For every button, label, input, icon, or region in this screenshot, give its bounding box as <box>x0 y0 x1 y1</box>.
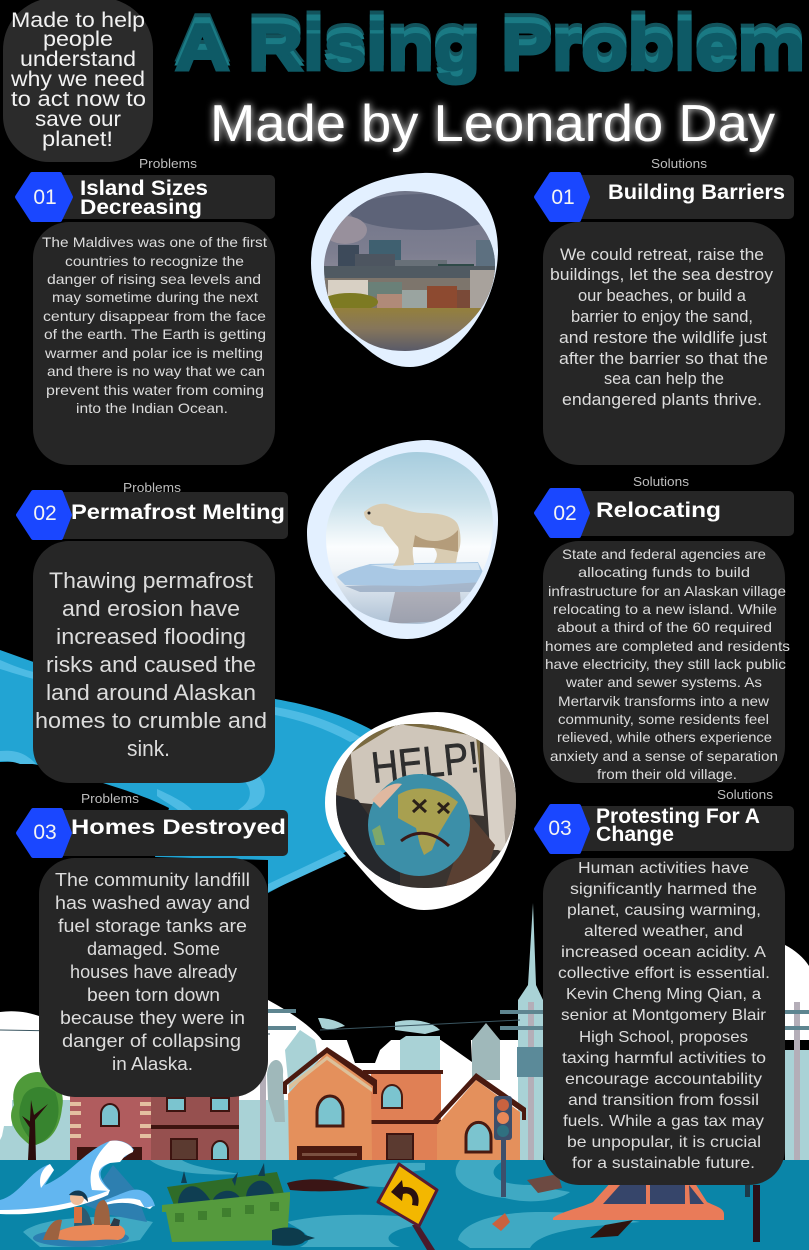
problem 1 text panel: danger of rising sea levels and <box>47 271 261 287</box>
problem 1 header: Decreasing <box>80 195 202 219</box>
solution 1 text panel: sea can help the <box>604 369 724 388</box>
solution 2 text panel: from their old village. <box>597 766 737 782</box>
subtitle: Made by Leonardo Day <box>210 95 775 153</box>
solution 2 text panel: allocating funds to build <box>578 564 750 580</box>
problem 1 text panel: century disappear from the face <box>43 308 266 324</box>
problem 3 text panel: houses have already <box>70 962 237 982</box>
solution 2 text panel: Mertarvik transforms into a new <box>558 693 770 709</box>
problem 3 text panel: because they were in <box>60 1008 245 1028</box>
intro note: save our <box>35 107 121 131</box>
solution 2 text panel: infrastructure for an Alaskan village <box>548 583 786 599</box>
solution 3 text panel: and transition from fossil <box>568 1092 759 1109</box>
solution 2 text panel: about a third of the 60 required <box>557 619 772 635</box>
person and dogs on raft <box>33 1191 129 1247</box>
solution 2 text panel: State and federal agencies are <box>562 546 766 562</box>
problem 2 text panel: increased flooding <box>56 624 246 649</box>
solution 3 text panel: altered weather, and <box>584 923 743 940</box>
problem 1 text panel: prevent this water from coming <box>46 382 264 398</box>
solution 3 text panel: increased ocean acidity. A <box>561 944 766 961</box>
solution 2 text panel: relocating to a new island. While <box>553 601 777 617</box>
solution 3 header: Change <box>596 822 674 846</box>
problem 3 header: 03 <box>33 821 57 844</box>
floating log <box>287 1179 370 1191</box>
solution 3 text panel: High School, proposes <box>579 1029 748 1046</box>
solution 3 header: 03 <box>548 817 572 840</box>
problem 1 text panel: The Maldives was one of the first <box>42 234 267 250</box>
problem 1 text panel: may sometime during the next <box>52 289 258 305</box>
problem 2 header <box>18 492 288 539</box>
solution 1 text panel: after the barrier so that the <box>559 349 768 368</box>
intro note: people <box>43 27 113 51</box>
photo: flooded city <box>311 173 500 367</box>
problem 3 header <box>18 810 288 856</box>
intro note <box>3 0 153 162</box>
problem 2 text panel: sink. <box>127 736 170 761</box>
solution 1 text panel: and restore the wildlife just <box>559 328 767 347</box>
problem 1 text panel: into the Indian Ocean. <box>76 400 228 416</box>
trash bag <box>272 1227 315 1246</box>
river background <box>0 650 372 893</box>
solution 3 text panel: fuels. While a gas tax may <box>563 1113 764 1130</box>
title: A Rising Problem <box>175 0 805 74</box>
solution 2 label: Solutions <box>633 474 690 489</box>
title: A Rising Problem <box>175 10 805 84</box>
solution 2 text panel: have electricity, they still lack public <box>545 656 786 672</box>
intro note: why we need <box>10 67 145 91</box>
problem 3 header: Homes Destroyed <box>71 815 286 839</box>
solution 2 text panel: anxiety and a sense of separation <box>550 748 778 764</box>
solution 3 text panel: be unpopular, it is crucial <box>567 1134 761 1151</box>
utility poles <box>0 1002 809 1160</box>
solution 3 label: Solutions <box>717 787 774 802</box>
problem 1 header: Island Sizes <box>80 176 208 200</box>
sinking car <box>553 1180 724 1220</box>
photo: polar bear on ice <box>307 440 500 639</box>
solution 1 text panel: We could retreat, raise the <box>560 245 764 264</box>
problem 1 text panel: warmer and polar ice is melting <box>44 345 263 361</box>
problem 2 text panel: homes to crumble and <box>35 708 267 733</box>
problem 1 label: Problems <box>139 156 198 171</box>
solution 3 header: Protesting For A <box>596 804 760 828</box>
solution 2 text panel: relieved, while others experience <box>557 729 772 745</box>
tree <box>11 1072 63 1160</box>
solution 2 header: 02 <box>553 502 577 525</box>
title: A Rising Problem <box>175 4 805 78</box>
problem 3 text panel: been torn down <box>87 985 220 1005</box>
solution 2 text panel: community, some residents feel <box>558 711 769 727</box>
problem 3 label: Problems <box>81 791 140 806</box>
problem 2 text panel: and erosion have <box>62 596 240 621</box>
solution 3 text panel: Kevin Cheng Ming Qian, a <box>566 986 761 1003</box>
solution 2 header <box>536 490 794 536</box>
orange houses <box>283 1047 526 1160</box>
solution 3 text panel: significantly harmed the <box>570 881 757 898</box>
flood water <box>0 1160 809 1250</box>
solution 1 text panel: endangered plants thrive. <box>562 390 762 409</box>
problem 3 text panel: The community landfill <box>55 870 250 890</box>
solution 2 text panel: water and sewer systems. As <box>565 674 762 690</box>
solution 2 header: Relocating <box>596 498 721 522</box>
problem 1 text panel: countries to recognize the <box>65 253 244 269</box>
problem 3 text panel <box>39 858 268 1097</box>
solution 3 text panel: collective effort is essential. <box>558 965 770 982</box>
solution 3 header <box>536 804 794 852</box>
solution 3 text panel: for a sustainable future. <box>572 1155 755 1172</box>
dumpster with bags <box>162 1163 290 1242</box>
problem 3 text panel: fuel storage tanks are <box>58 916 247 936</box>
solution 3 text panel: Human activities have <box>578 860 749 877</box>
problem 3 text panel: danger of collapsing <box>62 1031 241 1051</box>
solution 3 text panel: planet, causing warming, <box>567 902 761 919</box>
problem 2 label: Problems <box>123 480 182 495</box>
problem 1 text panel: of the earth. The Earth is getting <box>44 326 266 342</box>
problem 2 text panel: land around Alaskan <box>46 680 256 705</box>
problem 2 text panel: risks and caused the <box>46 652 256 677</box>
problem 3 text panel: has washed away and <box>55 893 250 913</box>
intro note: planet! <box>42 127 113 151</box>
solution 1 text panel: our beaches, or build a <box>578 286 747 305</box>
photo: sad globe with help sign <box>325 712 520 910</box>
problem 1 header <box>17 174 275 220</box>
problem 1 header: 01 <box>33 186 57 209</box>
intro note: Made to help <box>11 8 145 32</box>
skyline <box>0 903 809 1160</box>
moon and clouds <box>0 945 809 1160</box>
solution 3 text panel <box>543 858 785 1185</box>
photo: sad globe with help sign: HELP! <box>369 733 481 793</box>
solution 1 header: 01 <box>551 186 575 209</box>
problem 2 text panel: Thawing permafrost <box>49 568 253 593</box>
solution 2 text panel: homes are completed and residents <box>545 638 790 654</box>
intro note: understand <box>20 47 136 71</box>
problem 3 text panel: damaged. Some <box>87 939 220 959</box>
road sign <box>378 1164 437 1250</box>
solution 1 header <box>536 174 794 220</box>
wave <box>0 1140 155 1222</box>
city and flood illustration <box>0 903 809 1250</box>
solution 1 header: Building Barriers <box>608 180 785 204</box>
solution 1 text panel: barrier to enjoy the sand, <box>571 307 753 326</box>
problem 1 text panel: and there is no way that we can <box>47 363 265 379</box>
red houses <box>70 1075 239 1160</box>
solution 3 text panel: senior at Montgomery Blair <box>561 1007 767 1024</box>
traffic light <box>494 1096 512 1197</box>
floating debris <box>492 1174 760 1242</box>
solution 1 text panel: buildings, let the sea destroy <box>550 265 774 284</box>
solution 3 text panel: encourage accountability <box>565 1071 762 1088</box>
problem 2 header: 02 <box>33 502 57 525</box>
problem 3 text panel: in Alaska. <box>112 1054 193 1074</box>
solution 1 label: Solutions <box>651 156 708 171</box>
solution 3 text panel: taxing harmful activities to <box>562 1050 766 1067</box>
problem 1 text panel <box>33 222 275 465</box>
problem 2 header: Permafrost Melting <box>71 500 285 524</box>
solution 1 text panel <box>543 222 785 465</box>
problem 2 text panel <box>33 541 275 783</box>
solution 2 text panel <box>543 541 790 783</box>
intro note: to act now to <box>11 87 146 111</box>
